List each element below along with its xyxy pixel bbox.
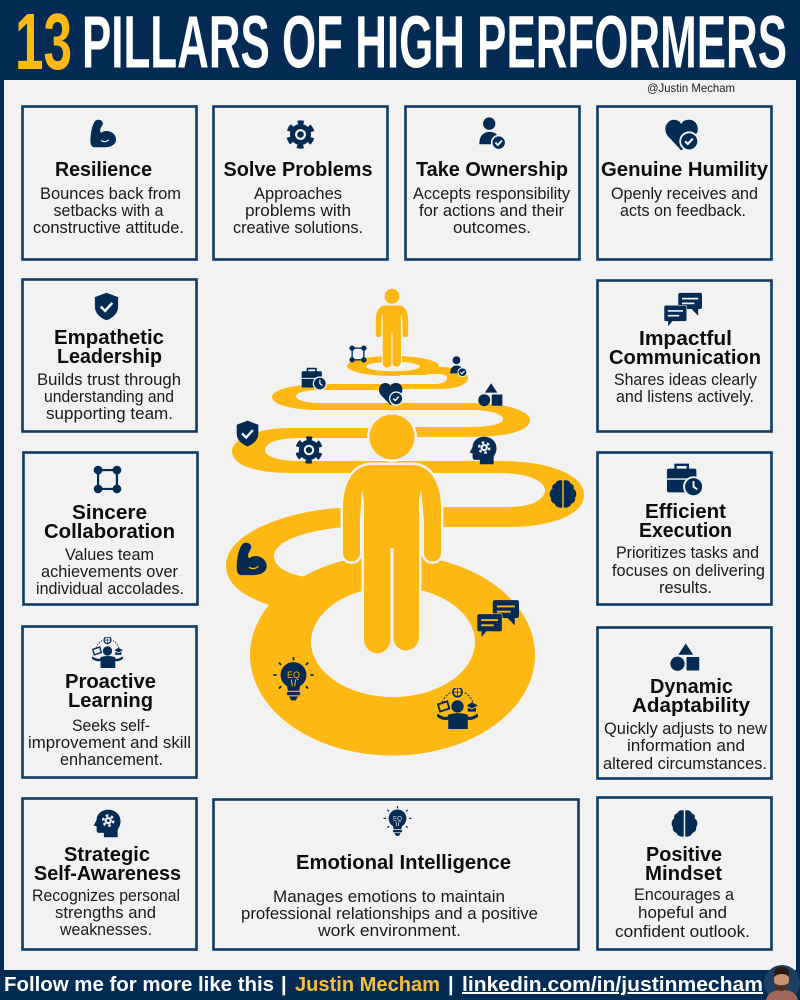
- icon: shield: [95, 293, 118, 320]
- icon: head gear on path: [470, 437, 497, 464]
- description: Openly receives and: [611, 184, 758, 203]
- avatar: [764, 965, 800, 1000]
- description: constructive attitude.: [33, 218, 184, 237]
- heading: [632, 676, 751, 717]
- description: Recognizes personal: [32, 886, 180, 905]
- panel: Genuine Humility: [598, 106, 772, 260]
- heading: Impactful: [639, 328, 732, 350]
- path: winding road: [226, 356, 584, 756]
- heading: Proactive: [65, 671, 156, 693]
- description: Prioritizes tasks and: [616, 543, 759, 562]
- description: work environment.: [317, 921, 461, 940]
- heading: Collaboration: [44, 521, 175, 543]
- description: individual accolades.: [36, 579, 184, 598]
- panel: Solve Problems: [214, 106, 388, 260]
- icon: brain: [672, 810, 697, 837]
- footer text: Follow me for more like this: [4, 974, 274, 996]
- icon: collaboration nodes on path: [349, 345, 367, 363]
- heading: Execution: [639, 520, 732, 542]
- icon: gear on path: [298, 439, 320, 461]
- footer text: |: [448, 974, 454, 996]
- icon: learner: [93, 637, 123, 668]
- heading: [645, 844, 722, 885]
- icon: bulb on path: [273, 657, 314, 700]
- description: [614, 370, 757, 406]
- heading: Solve Problems: [224, 159, 372, 181]
- heading: [44, 502, 175, 543]
- icon: brain on path: [550, 480, 576, 508]
- description: supporting team.: [46, 404, 173, 423]
- heading: [609, 328, 761, 369]
- description: results.: [659, 578, 712, 597]
- icon: nodes: [94, 466, 121, 493]
- description: Quickly adjusts to new: [604, 719, 768, 738]
- panel: Dynamic Adaptability: [598, 628, 772, 778]
- description: [615, 885, 750, 941]
- footer text: |: [281, 974, 287, 996]
- icon: briefcase on path: [302, 369, 326, 390]
- heading: Dynamic: [650, 676, 733, 698]
- icon: person check: [479, 117, 506, 150]
- description: improvement and skill: [28, 733, 191, 752]
- icon: muscle on path: [237, 543, 267, 575]
- description: [37, 370, 181, 423]
- heading: Self-Awareness: [34, 863, 181, 885]
- heading: Learning: [68, 690, 153, 712]
- credit: @Justin Mecham: [647, 81, 735, 95]
- description: Values team: [65, 545, 154, 564]
- icon: shapes: [670, 644, 699, 671]
- description: for actions and their: [419, 201, 564, 220]
- heading: Resilience: [55, 159, 152, 181]
- heading: Genuine Humility: [601, 159, 769, 181]
- description: and listens actively.: [616, 387, 754, 406]
- heading: [34, 844, 181, 885]
- description: Shares ideas clearly: [614, 370, 757, 389]
- heading: [54, 327, 164, 368]
- heading: Communication: [609, 347, 761, 369]
- heading: Leadership: [57, 346, 162, 368]
- icon: briefcase clock: [667, 465, 703, 496]
- description: [612, 543, 765, 597]
- icon: chat bubbles: [664, 293, 702, 327]
- description: [28, 716, 191, 769]
- icon: gear: [289, 123, 312, 146]
- footer text: linkedin.com/in/justinmecham: [462, 974, 763, 996]
- icon: head with gear: [94, 810, 121, 837]
- panel: Strategic Self-Awareness: [22, 798, 196, 950]
- description: outcomes.: [453, 218, 531, 237]
- description: information and: [627, 736, 745, 755]
- description: altered circumstances.: [603, 754, 767, 773]
- description: [32, 886, 180, 939]
- description: professional relationships and a positive: [241, 904, 538, 923]
- icon: heart on path: [379, 383, 403, 405]
- icon: chat on path: [477, 600, 519, 638]
- description: achievements over: [41, 562, 178, 581]
- panel: Efficient Execution: [598, 452, 772, 604]
- heading: Strategic: [64, 844, 150, 866]
- icon: person check on path: [450, 356, 467, 377]
- icon: learner on path: [438, 687, 478, 729]
- description: Approaches: [254, 184, 342, 203]
- description: focuses on delivering: [612, 561, 765, 580]
- description: weaknesses.: [59, 920, 152, 939]
- description: [33, 184, 184, 237]
- icon: EQ bulb: [384, 806, 411, 836]
- heading: Sincere: [72, 502, 147, 524]
- description: creative solutions.: [233, 218, 363, 237]
- description: problems with: [245, 201, 351, 220]
- description: Manages emotions to maintain: [273, 887, 505, 906]
- description: Encourages a: [634, 885, 735, 904]
- panel: Emotional Intelligence: [214, 800, 578, 950]
- heading: Efficient: [645, 501, 726, 523]
- description: hopeful and: [638, 903, 727, 922]
- description: [241, 887, 538, 940]
- heading: Adaptability: [632, 695, 751, 717]
- description: enhancement.: [60, 750, 163, 769]
- panel: Sincere Collaboration: [24, 452, 198, 604]
- heading: [65, 671, 156, 712]
- description: Builds trust through: [37, 370, 181, 389]
- heading: Mindset: [645, 863, 722, 885]
- description: [36, 545, 184, 598]
- heading: Empathetic: [54, 327, 164, 349]
- panel: Impactful Communication: [598, 280, 772, 432]
- description: understanding and: [44, 387, 174, 406]
- panel: Empathetic Leadership: [22, 280, 196, 432]
- footer text: Justin Mecham: [295, 974, 440, 996]
- figure: large person: [343, 412, 441, 653]
- icon: shapes on path: [478, 383, 502, 406]
- description: [603, 719, 768, 773]
- description: setbacks with a: [54, 201, 164, 220]
- icon: heart check: [665, 120, 698, 150]
- description: Accepts responsibility: [413, 184, 570, 203]
- heading: Take Ownership: [416, 159, 568, 181]
- footer bar: [0, 970, 800, 1000]
- panel: Proactive Learning: [22, 626, 196, 778]
- description: Seeks self-: [72, 716, 150, 735]
- description: confident outlook.: [615, 922, 750, 941]
- panel: Resilience: [22, 106, 196, 260]
- description: [413, 184, 570, 237]
- footer text: [4, 974, 763, 996]
- illustration: winding path with figures: [226, 289, 584, 756]
- icon: shield on path: [237, 421, 258, 446]
- heading: [639, 501, 732, 542]
- description: strengths and: [55, 903, 156, 922]
- description: acts on feedback.: [620, 201, 746, 220]
- description: [233, 184, 363, 237]
- figure: small person: [376, 289, 408, 368]
- description: Bounces back from: [40, 184, 181, 203]
- icon: flexed arm: [90, 120, 116, 147]
- panel: Positive Mindset: [598, 798, 772, 950]
- heading: Emotional Intelligence: [296, 852, 511, 874]
- description: [611, 184, 758, 220]
- heading: Positive: [646, 844, 722, 866]
- panel: Take Ownership: [406, 106, 580, 260]
